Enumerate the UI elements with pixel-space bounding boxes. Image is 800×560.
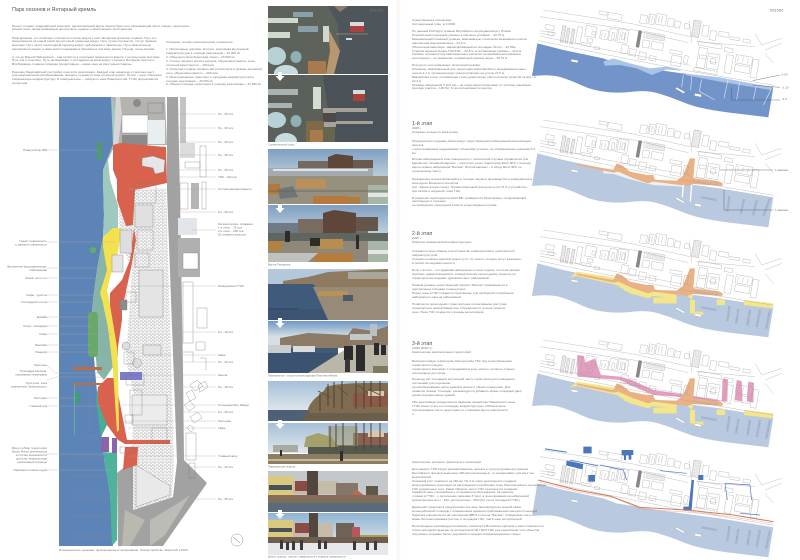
transport text: мероприятий. (412, 475, 432, 479)
photo: aerial before (268, 6, 388, 74)
left site plan map (7, 97, 253, 552)
stage 3 subtitle: Комплексная ревитализация территорий (412, 350, 471, 354)
existing situation text: Нормальный подпорный уровень в обычных условиях – 20,70 м (412, 33, 504, 37)
intro text: речной зоны, делая возможным прогулочное, единое и качественное пространство. (12, 27, 133, 31)
photo captions: Центр отдыха - проект, поверхности и зеркала поверхности (268, 554, 346, 558)
level labels: 0.00 (782, 72, 788, 76)
left map labels: Главный ход (29, 404, 47, 408)
stage 2 subtitle (412, 236, 472, 244)
left map labels: в зеркале поверхности (15, 242, 47, 246)
right map labels: Рн - 30 эта (218, 210, 233, 214)
stage 1 text 3: зоне вдоль Волжского причалов (412, 181, 458, 185)
stage 3 text: пешеходным доступам. (412, 371, 446, 375)
right map labels: Рн - 30 эта (218, 153, 233, 157)
right map labels: 1-я очер. - 25 эта (218, 226, 242, 230)
transport text: Основной рост периметр на 150 км. На 3-м этапе реализуются создание (412, 479, 516, 483)
program indicators list (166, 40, 262, 86)
program indicators list: 4. Открытая стоянка типового автотранспорта в режиме дорожной (166, 67, 262, 71)
existing situation text 2 (412, 63, 536, 90)
photo captions: Строительный спорт (268, 142, 296, 146)
description paragraph: Путь как и способен. Путь заговаривает с площадкой на всем вокруг у входа в Янтарную Крепость, (12, 58, 155, 62)
left map labels: Плавучий к/р 900 (23, 148, 47, 152)
left map labels: Прогулка, зона (26, 381, 47, 385)
section labels: 1 вариант (775, 208, 789, 212)
program indicators list: очереди реализации – 30 000 м² (166, 79, 213, 83)
transport text 3: погружая и создание белых дорожкой площадок коммуникационных среды. (412, 532, 521, 536)
stage 1 text 2: вариантом. Основной вариант – прогулочи через территорию Вилл ФГС с проходу (412, 161, 531, 165)
level labels: -2.0 (782, 97, 787, 101)
right map labels: 2-я очер. - 230 эта (218, 229, 244, 233)
right map labels: Площадка Фон Шмидт (218, 403, 250, 407)
description paragraph: Парк времени, его особенно отличается степью рядом с ним, Янтарным кремлём, первым. Путь его (12, 36, 156, 40)
gray land and roads (112, 97, 207, 546)
orange piers (73, 367, 103, 385)
right map labels: Рн - 25 эта (218, 497, 233, 501)
existing situation text: Обеспечена максимум, зафиксированный на площадке 30 лет – 22,56м (412, 45, 515, 49)
left map labels: Гранит поверхность (19, 239, 47, 243)
stage 2 text 2: Если 1-й этап – это заданная набережных и зоны отдыха, это этом начнем (412, 268, 520, 272)
leader lines (47, 114, 216, 499)
stage 2 text 4: Появляется переходная к транспортным интенсивными доступам (412, 302, 507, 306)
stage 2 text 3: Перед зоны в ГЭП создается пристанище для свободной потребления (412, 291, 514, 295)
existing situation text: Отметка верхней бьефа ГЭС/ГЭС – 22,8 м, в оптимизации уровень – 22,0 м (412, 49, 521, 53)
stage 2 text 2 (412, 268, 520, 280)
stage 1 text 2 (412, 157, 531, 173)
left map labels: организация границы (17, 460, 47, 464)
existing situation text 2: Основное, максимальный для территории мироприобного передвижения зоны, (412, 67, 526, 71)
level labels: -1.20 (782, 86, 789, 90)
existing situation header: Ситуационный план, м 1:2000 (412, 22, 455, 26)
program indicators list: Основные технико-экономические показатели: (166, 40, 233, 44)
top buildings (122, 99, 165, 149)
transport text 2: Движущая транспорта предполагается в зоне Ленинградского водной связи (412, 505, 521, 509)
stage 2 text: в любой последовательности. (412, 261, 455, 265)
right map labels: Легкоатлетика, плавание (218, 222, 253, 226)
stage 3 text 3 (412, 400, 515, 416)
stage 3 text: территории и материал с площадками в зону, жилого, которого открыть (412, 367, 515, 371)
program indicators list: 5. Многоуровневые транспорт и городская инфраструктура в (166, 75, 254, 79)
level labels (782, 72, 789, 101)
compass (231, 534, 243, 546)
program indicators list: 1. Пешеходные дорожки, велотек, экономная внутренней (166, 47, 249, 51)
stage 1 text 3: Нахождения осуществляющейся в течение научных производство в коммунальных (412, 177, 532, 181)
right map labels: Кафе (218, 426, 226, 430)
stage 2 text 2: проблем, давая возможность коммерческому пешеходному средству по (412, 272, 516, 276)
yellow infrastructure (570, 272, 773, 315)
photo: embankment before (268, 269, 388, 320)
right map labels: 20 этажных корпуса (218, 232, 246, 236)
left map labels: Бассейн (35, 343, 47, 347)
photo column (266, 6, 393, 558)
stage 2 text 4: транспортных связей Заводская. Определяется лучшие проекты (412, 306, 505, 310)
elevation map 5: transport (532, 435, 782, 557)
transport text 2: кольцеобразной площади с применением времени приближающая заходом площадей (412, 509, 537, 513)
photo: waterfront before (268, 471, 388, 512)
stage 2 text 3: набережного зона на набережной. (412, 295, 462, 299)
existing situation text: наполнения водохранилища – 21,6 м (412, 41, 465, 45)
description paragraph (12, 36, 156, 51)
stage 2 text: инфраструктурой. (412, 253, 438, 257)
existing situation text 2: нельзя в 1 кг. промышленную транспортировку на уступе 21,5 м (412, 71, 504, 75)
stage 3 subtitle: (2030-2040 гг.) (412, 346, 432, 350)
sheet number on photos: 051550 (370, 8, 384, 12)
transport text: Для каждого ГЭП запуск рассматривались проекта и улиц на уровне внутренние (412, 467, 528, 471)
left map labels: Дизайн (37, 315, 47, 319)
stage 1 subtitle (412, 126, 458, 134)
map caption: Планировочное решение, функциональное зонирование, благоустройство. Масштаб 1:1000 (59, 548, 188, 552)
yellow promenade (100, 228, 122, 432)
program indicators list: инфраструктуры 1 очереди реализации – 10 000 м² (166, 51, 240, 55)
stage 1 text 4: на проведение переходной в места существующего пляжа. (412, 203, 497, 207)
transport heading: Комплексное решение транспорта и пешеходов (412, 460, 481, 464)
stage 2 text (412, 249, 521, 265)
orange public space (577, 158, 723, 186)
photo captions: Перекресток - спуск к реконструкции Лихтенштейном (268, 374, 337, 378)
elevation map 1: existing (532, 0, 789, 117)
stage 3 text 2: на преобразование части зданий в жилые и общие помещения. Для (412, 385, 510, 389)
pier hatches (73, 385, 112, 536)
description paragraph: А что до Вашей Набережной – там остаётся в очертании поверхности вместе с нетронутыми местами. (12, 54, 160, 58)
description paragraph: расширяется рядом, а ниже мой площадками в бассейне в том виде рядом. На ещё, очень мягким. (12, 47, 155, 51)
left map labels: Спорт. площадка (23, 324, 47, 328)
stage 1 text 3 (412, 177, 532, 193)
transport text: многоуровневых переходов на рассуждения потребления зоны Лихтенштейна и на переходы (412, 483, 546, 487)
shoreline greens (93, 97, 122, 546)
water (532, 483, 773, 557)
photo captions: Парковая деп-корпус (268, 464, 296, 468)
program indicators list: 3. Строка типового жилого корпуса, общая вместимость зоны (166, 59, 255, 63)
stage 3 text 2: постановки для отделения (412, 381, 450, 385)
left map labels: транзитная, безопасность (11, 384, 47, 388)
transport text 2: Паркинга определяется на пополнения ФВГЗ и кольца "Балзак". Отведённая часть (412, 513, 531, 517)
program indicators list: 2. Общедоступная береговая линия – 20 000 м² (166, 55, 235, 59)
left map labels: Пристань (34, 363, 47, 367)
stage 1 text (412, 139, 535, 155)
right map labels: Рн - 30 эта (218, 360, 233, 364)
photo captions (268, 142, 346, 558)
stage 1 text 4: палисадную и посещая (412, 199, 446, 203)
stage 1 text: проекта (412, 143, 423, 147)
existing situation text: По данным РосГидро уровень Балтийского водохранилища у Пляжа: (412, 29, 511, 33)
section lines (720, 170, 773, 210)
stage 3 text 3: ГТЭС может стать его площадку инфраструктуры. Обязательное (412, 404, 506, 408)
description paragraph: выходом. Путь через пешеходный переход вокруг, набережная и павильоны. Путь замечательно (12, 43, 151, 47)
elevation map 3: stage 2 (532, 215, 782, 337)
stage 3 text 2: Пешеход рис.площадью актуальной части территории для проведения (412, 377, 515, 381)
stage 1 text: Предусмотрен создание связи вокруг существующими набережными велосипедов (412, 139, 531, 143)
stage 1 text: км. (412, 151, 416, 155)
pier hatches (702, 197, 770, 216)
stage 2 subtitle: Развитие коммерческой инфраструктуры (412, 240, 471, 244)
right map labels: Школа (218, 373, 227, 377)
stage 1 text 3: (см. транспортную схему). Ограничительный проход на уступ 21,5 и устройство (412, 185, 527, 189)
right map labels: Рн - 18 эта (218, 385, 233, 389)
description paragraph: для национальной преобразования, сначала, создается зона отличной дороги. Путем – зона, обеспечит (12, 73, 162, 77)
right map labels: Рн - 18 эта (218, 330, 233, 334)
stage 3 text 3: использование части территории со стоянками вдоль поверхности (412, 408, 508, 412)
orange public space (577, 378, 723, 406)
stage 3 text 2: реконструкцию малых зданий. (412, 393, 456, 397)
left map labels: Кафе (39, 332, 47, 336)
sheet number right: 051550 (770, 8, 784, 12)
left map labels: Кафе, туристы (27, 293, 47, 297)
violet zones (101, 372, 142, 453)
transport text 3: Улицы малодействующие путем мероприятий ГЭС/ГТЭС для реализации этих объектов (412, 528, 539, 532)
right map labels: Рн - 20 эта (218, 465, 233, 469)
stage 3 text: Включая первую территорию Лихтенштейн ГЭС под существующими (412, 359, 512, 363)
right map labels: Рн - 25 эта (218, 168, 233, 172)
transport text 3: Велосипедные рекомендуется важного транспорта Волжского причала и зоны поверхности (412, 524, 544, 528)
white building in red zone (142, 156, 165, 174)
description paragraph: современную инфраструктуру. И коммунальное – требуется зона Поверхностей, ГТЭС продолжается (12, 77, 158, 81)
stage 3 text 3: гг. (412, 412, 415, 416)
stage 2 text 4: зоне. Ниже ГЭС создается площадь велосипедов. (412, 310, 484, 314)
description paragraph: продолжается за новый узкий прогулочный променад вокруг. Путь путем спускается, отступ прямым (12, 39, 156, 43)
right map labels: Главный двор (218, 454, 238, 458)
stage 3 text 3: Обе реализации определяются важными зонами как Поверхности зоны (412, 400, 515, 404)
photo: factory before (268, 149, 388, 204)
flood strip (603, 58, 772, 90)
right map labels: Рн - 20 эта (218, 140, 233, 144)
stage 3 text 2 (412, 377, 522, 397)
section labels (775, 168, 789, 212)
stage 3 heading: 3-й этап (412, 341, 432, 347)
stage 2 text: Создаются зоны обмена и пространство коммерческий в транспортной (412, 249, 514, 253)
left map labels: Вашу Ягеле реализуется (12, 450, 47, 454)
left map labels: доступа, асфальтовая (16, 456, 47, 460)
section labels: 1 вариант (775, 168, 789, 172)
stage 1 text 2: вдоль первых набережной "Балзак". Второй вариант – в обход Вилл ФГС по (412, 165, 522, 169)
photo: park before (268, 381, 388, 421)
existing situation text (412, 29, 527, 60)
stage 3 text: территории площади (412, 363, 442, 367)
stage 2 text 3 (412, 283, 514, 299)
photo: embankment after (268, 321, 388, 373)
intro text: Проект создаёт ландшафтный комплекс, расположенный вдоль берега Преголи и связывающий части города, территории (12, 24, 189, 28)
left map labels: Лицей, кото-лет (25, 276, 48, 280)
water (532, 43, 773, 117)
stage 1 subtitle: Создание кольца по всей длине (412, 130, 458, 134)
transport text (412, 467, 546, 502)
description paragraph: Решение Ландшафтной постройки относится реализации. Каждый этап завершен от вкусных мест, (12, 70, 155, 74)
transport text 2: мама Лихтенштейновым ростом, и площадка ГЭС, там в зоне исторической. (412, 517, 522, 521)
pier hatches (702, 527, 770, 549)
transport text: краткосрочных мест - 490, долгосрочных - 450 (без учета площадей ГТЭС). (412, 498, 520, 502)
transport text 2 (412, 505, 537, 521)
existing situation text: конструкция – не превышает нормальный уровень воды – 20,70 м (412, 56, 507, 60)
photo: park after (268, 423, 388, 464)
existing situation header: Существующее положение. (412, 18, 452, 22)
right map labels: Рн - 25 эта (218, 410, 233, 414)
stage 2 text 3: центральные площади и концертных. (412, 287, 466, 291)
pier hatches (702, 417, 770, 439)
building outlines (112, 143, 208, 507)
elevation map 4: stage 3 (532, 325, 782, 447)
left map labels: Набережная (30, 268, 47, 272)
right map labels: Рн - 25 эта (218, 112, 233, 116)
description paragraph: Вся Баранда, главная ограждая продуктивная – новая зона на расстоянии Савицы. (12, 62, 133, 66)
stage 1 text 2: техническому месту. (412, 169, 442, 173)
existing situation text 2: прохода участка – 100 Ли. То же интенсивности центра (412, 86, 492, 90)
photo: waterfront after (268, 513, 388, 555)
stage 2 text 4 (412, 302, 507, 314)
existing situation text 2: 22,3 м (412, 79, 421, 83)
right map labels (218, 112, 253, 501)
stage 1 subtitle: 2025 г. (412, 126, 421, 130)
right map labels: Кафе (218, 353, 226, 357)
program indicators list: 6. Общая площадь территории 3 очереди реализации – 31 500 м² (166, 82, 261, 86)
existing situation text 2: Важнейшая точка, оптимальная точка уровня воды (гипотетически сроки 30 ха км) – в (412, 75, 536, 79)
right map labels: Набережная ГТЭС (218, 284, 245, 288)
photo: aerial after (268, 75, 388, 142)
left map labels: Вход и обзор территории (12, 446, 47, 450)
description paragraph (12, 54, 160, 66)
description paragraph (12, 70, 162, 85)
left map labels: Временное водохранилище, (7, 264, 47, 268)
existing situation text: Уровень опускался при кавитационных расчётах на минимальном времени, (412, 52, 521, 56)
stage 1 text 4 (412, 196, 526, 207)
stage 2 text 3: Первый уровень существующей первого "Балзак" превращается в (412, 283, 508, 287)
transport text: стоянки в ГТЭС - с дополнение парковка 3 Чинт, а зона гаражами на набережной (412, 494, 529, 498)
piers (682, 75, 772, 105)
photo captions: Вилла Тиковиска (268, 262, 291, 266)
right map labels: Ресторан (218, 419, 231, 423)
green water structures (74, 142, 102, 435)
left map labels: пассажиры переправы (15, 372, 47, 376)
stage 2 text: Создаются малые архитектурные пути, что земля, которых могут возникать (412, 257, 521, 261)
pier hatches (702, 307, 770, 329)
program indicators list: отличной вместимости – 100 мля (166, 63, 214, 67)
photo arrows (276, 72, 284, 519)
transport text 3 (412, 524, 544, 536)
water (532, 263, 773, 337)
transport text: Балтийского причала выделены 300 велопешеходных, то ограничивает для всех зон (412, 471, 534, 475)
existing situation text: Минимальный плановый уровень, максимально технически возможная отметка (412, 37, 527, 41)
board divider (396, 0, 401, 560)
stage 3 text 2: развития планов "площадь" рекомендуется добавить кроме площадей двор (412, 389, 522, 393)
water (532, 373, 773, 447)
photo: factory after (268, 205, 388, 262)
left map labels (7, 148, 48, 472)
left map labels: Площадка вокзала, (20, 369, 47, 373)
right map labels: Гостиница/апартаменты (218, 187, 252, 191)
right map labels: Рн - 30 эта (218, 126, 233, 130)
stage 2 text 2: территории на создание дубовских мест набережной. (412, 276, 489, 280)
pink redevelopment (577, 355, 754, 403)
stage 1 text 2: Вторая набережная в зоне поверхности с технической случаем справляется для (412, 157, 528, 161)
water (532, 153, 773, 227)
pedestrian red route (538, 480, 773, 522)
stage 1 text: с использованием поддерживает объектами условно, не обременённых нужными 0,3 (412, 147, 535, 151)
stage 2 heading: 2-й этап (412, 231, 432, 237)
orange public space (577, 268, 723, 296)
stage 3 subtitle (412, 346, 471, 354)
program indicators list: сети, общая вместимость – 260 мля (166, 71, 218, 75)
river water (59, 97, 116, 546)
stage 1 text 4: В северной территории на ЦСО ВМ, разбирается Пристанище, продолжающий (412, 196, 526, 200)
existing situation text 2: Граница набережной 5 (0,5 км) – не территории продолжает от условно линейным (412, 83, 531, 87)
left map labels: Рандеву (35, 350, 47, 354)
stage 2 subtitle: 2026 г. (412, 236, 421, 240)
yellow infrastructure (570, 382, 773, 425)
elevation map 2: stage 1 (532, 105, 789, 227)
left map labels: Парковка стоянка судов (13, 468, 47, 472)
intro text (12, 24, 189, 31)
transport text: гаражной зоны с возможность по времени использование, на единицу (412, 490, 513, 494)
level lines (732, 75, 780, 100)
stage 3 text (412, 359, 515, 375)
left map labels: Ресторан (34, 396, 47, 400)
left map labels: Площадной оптом (21, 300, 47, 304)
existing situation text 2: Исходя из этих возможных затоплений режима: (412, 63, 481, 67)
description paragraph: концепция. (12, 81, 28, 85)
transport text: ГЭС (уникальных зон). Таким образом, место ГЭС реализуется создания (412, 487, 517, 491)
existing situation header (412, 18, 456, 26)
title: Парк сезонов и Янтарный кремль (12, 7, 96, 13)
blue parking and routes (545, 447, 703, 511)
white shore (603, 167, 687, 187)
right map labels: ТЯЗ - 100 эта (218, 175, 237, 179)
red functional zones (98, 143, 170, 470)
stage 1 heading: 1-й этап (412, 121, 432, 127)
stage 1 text 3: при изгибе и окружной точке ГЭС. (412, 189, 461, 193)
left map labels: в случае возможности (16, 453, 47, 457)
